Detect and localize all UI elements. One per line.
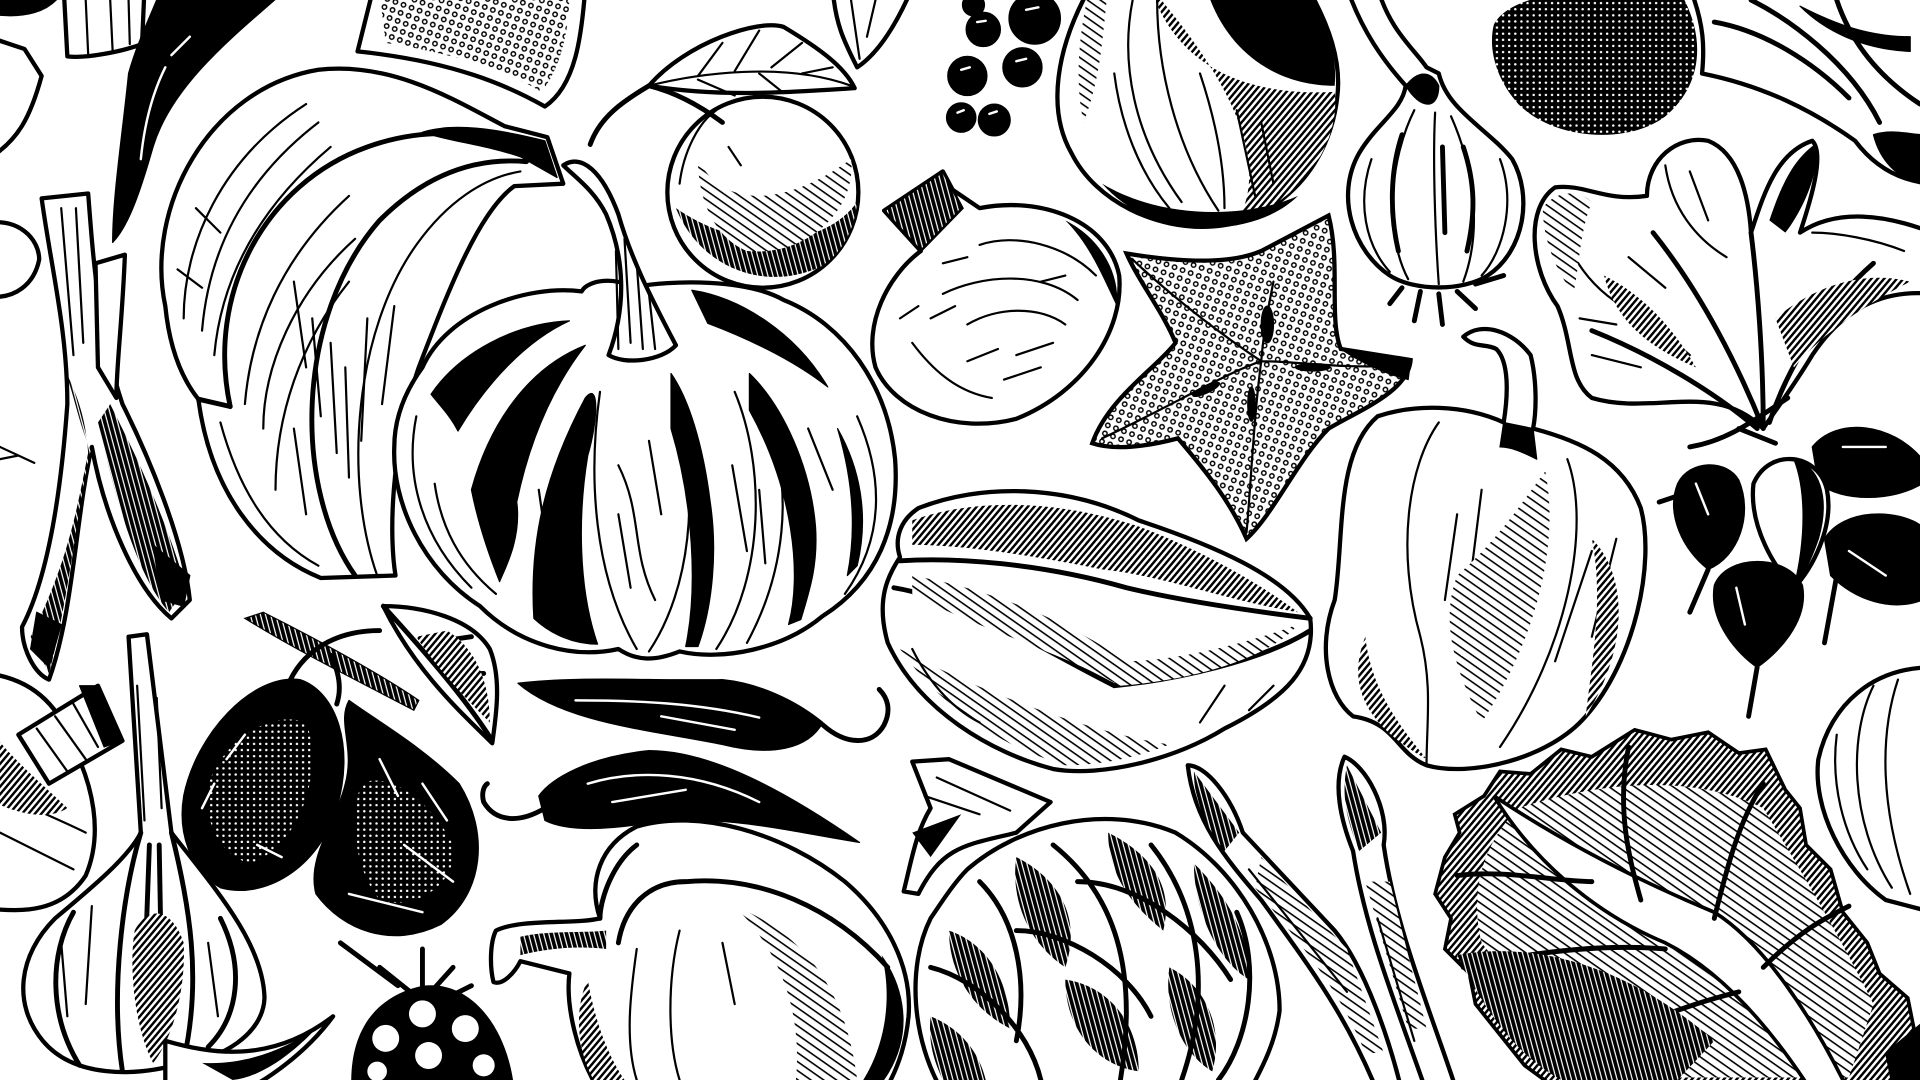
twin plums with leaf <box>182 606 497 936</box>
chilies <box>483 679 888 842</box>
top-left mushroom and stem fragments <box>0 0 144 463</box>
bell pepper bottom <box>491 820 909 1080</box>
chili top-left <box>113 0 282 242</box>
raspberry <box>340 943 514 1080</box>
small onion <box>1347 0 1523 324</box>
asparagus left <box>22 193 190 680</box>
garlic <box>23 634 333 1080</box>
broccoli <box>1492 0 1920 184</box>
plum with leaf <box>590 25 858 288</box>
leaf top fragment <box>833 0 912 67</box>
star fruit top fragment <box>358 0 585 107</box>
asparagus bottom <box>1188 757 1457 1080</box>
mushroom left <box>0 673 122 910</box>
large onion <box>1057 0 1338 228</box>
banana bunch <box>161 69 563 578</box>
pumpkin <box>394 162 896 658</box>
star fruit <box>1092 216 1411 539</box>
chayote <box>883 491 1311 771</box>
berries top <box>947 0 1060 136</box>
artichoke <box>904 759 1280 1080</box>
radishes with leaves <box>1535 140 1920 716</box>
mushroom center <box>872 171 1120 424</box>
onion right <box>1818 667 1920 1080</box>
lettuce <box>1435 730 1920 1080</box>
bell pepper right <box>1326 329 1645 769</box>
